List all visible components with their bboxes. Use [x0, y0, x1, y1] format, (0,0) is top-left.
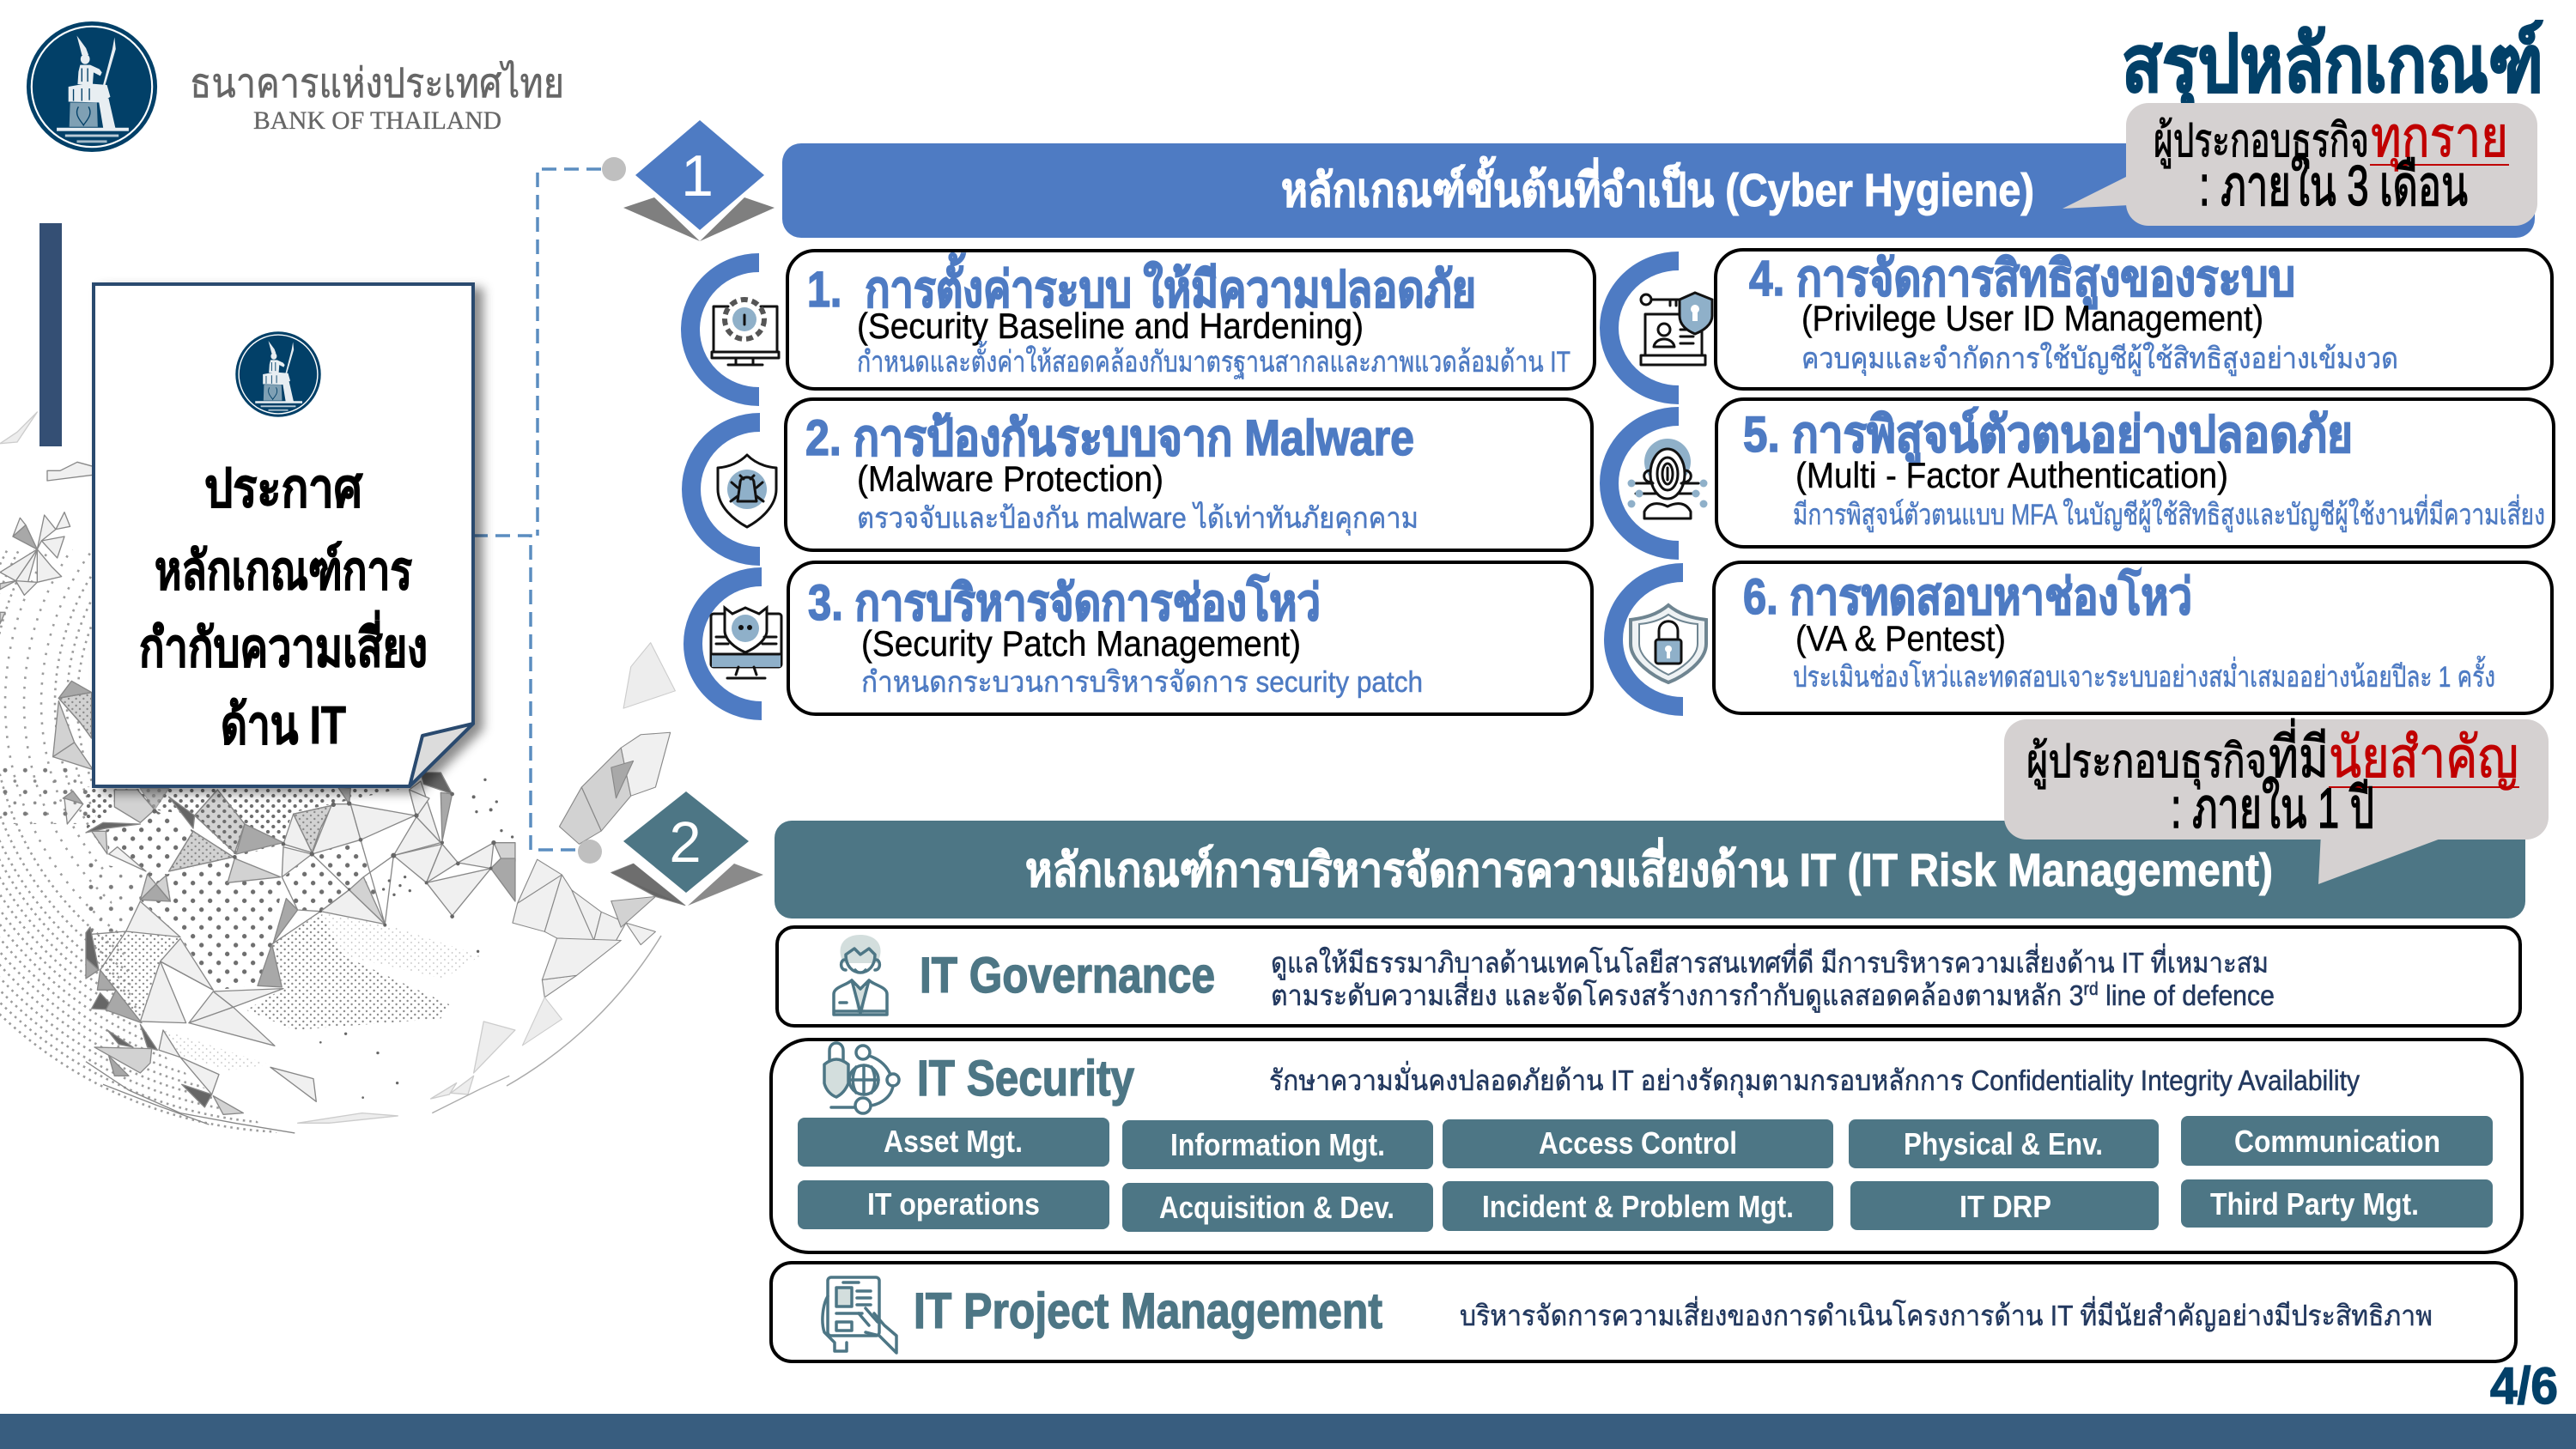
mesh below card	[86, 773, 515, 1133]
description: บริหารจัดการความเสี่ยงของการดำเนินโครงการด้าน IT ที่มีนัยสำคัญอย่างมีประสิทธิภาพ	[1460, 1296, 2433, 1331]
card frame	[1714, 562, 2552, 713]
description: รักษาความมั่นคงปลอดภัยด้าน IT อย่างรัดกุมตามกรอบหลักการ Confidentiality Integrity Availability	[1269, 1061, 2360, 1098]
heading: IT Security	[917, 1051, 1134, 1106]
title: 2. การป้องกันระบบจาก Malware	[805, 410, 1414, 466]
callout: all operators within 3 months: ผู้ประกอบธุรกิจ	[2154, 115, 2369, 169]
description line 1: ดูแลให้มีธรรมาภิบาลด้านเทคโนโลยีสารสนเทศที่ดี มีการบริหารความเสี่ยงด้าน IT ที่เหมาะสม	[1271, 943, 2269, 980]
chip: Asset Mgt.	[798, 1118, 1109, 1167]
panel: item 1 baseline	[690, 251, 1595, 397]
icon: fingerprint	[1628, 439, 1707, 518]
mesh left of card	[0, 412, 93, 824]
panel: item 5 MFA	[1609, 399, 2554, 550]
title: 3. การบริหารจัดการช่องโหว่	[808, 573, 1321, 631]
icon: lock shield	[1631, 605, 1706, 682]
callout: all operators within 3 months: ทุกราย	[2371, 105, 2508, 172]
card heading line 3: กำกับความเสี่ยง	[139, 610, 428, 678]
icon: person	[834, 935, 887, 1015]
panel: item 3 patch	[693, 562, 1592, 714]
subtitle: (Security Baseline and Hardening)	[857, 306, 1364, 346]
description line 2: ตามระดับความเสี่ยง และจัดโครงสร้างการกำกับดูแลสอดคล้องตามหลัก 3	[1271, 979, 2157, 1011]
card frame	[1716, 250, 2552, 389]
callout: significant operators within 1 year: นัยสำคัญ	[2329, 725, 2518, 790]
chip: Acquisition & Dev.: Acquisition & Dev.	[1159, 1190, 1394, 1225]
chip: Third Party Mgt.: Third Party Mgt.	[2210, 1186, 2419, 1222]
chip: Incident & Problem Mgt.: Incident & Problem Mgt.	[1482, 1189, 1794, 1224]
diamond badge 2	[611, 786, 763, 906]
subtitle: (Privilege User ID Management)	[1801, 298, 2263, 338]
card heading line 4: ด้าน IT	[221, 696, 346, 755]
icon: shield bug	[718, 455, 776, 527]
description: ควบคุมและจำกัดการใช้บัญชีผู้ใช้สิทธิสูงอย่างเข้มงวด	[1801, 342, 2398, 376]
panel: IT Governance	[777, 927, 2520, 1026]
globe network background	[0, 274, 725, 1133]
diamond badge 1: 1	[681, 143, 714, 209]
chip: IT operations: IT operations	[867, 1186, 1040, 1222]
card frame	[786, 399, 1592, 550]
English bank name: BANK OF THAILAND	[253, 106, 501, 135]
panel: IT Project Management	[771, 1263, 2516, 1361]
Thai bank name: ธนาคารแห่งประเทศไทย	[190, 59, 564, 106]
connector: dashed lines	[473, 157, 626, 864]
ring	[1609, 261, 1679, 395]
chip: Access Control: Access Control	[1539, 1125, 1737, 1161]
footer bar	[0, 1414, 2576, 1449]
section header bar 2	[775, 821, 2525, 919]
card frame	[788, 562, 1592, 714]
chip: IT DRP: IT DRP	[1959, 1189, 2051, 1224]
ring	[691, 422, 760, 556]
chip: IT DRP	[1850, 1181, 2159, 1230]
description: กำหนดกระบวนการบริหารจัดการ security patch	[861, 666, 1423, 699]
chip: Acquisition & Dev.	[1122, 1183, 1433, 1232]
mesh right of globe	[453, 643, 685, 1046]
subtitle: (Security Patch Management)	[861, 623, 1301, 664]
chip: Communication: Communication	[2234, 1124, 2440, 1159]
callout: significant operators within 1 year: ที่มี	[2269, 718, 2329, 789]
chip: Communication	[2181, 1116, 2493, 1166]
title: 1. การตั้งค่าระบบ ให้มีความปลอดภัย	[807, 253, 1476, 318]
panel: announcement card	[94, 284, 473, 786]
chip: Information Mgt.	[1122, 1120, 1433, 1169]
left accent bar	[39, 223, 62, 446]
ring	[1613, 573, 1683, 706]
panel: IT Security	[771, 1040, 2522, 1252]
icon: small seal	[235, 331, 321, 417]
ring	[693, 577, 762, 711]
description: ตรวจจับและป้องกัน malware ได้เท่าทันภัยคุกคาม	[857, 501, 1419, 536]
title: 5. การพิสูจน์ตัวตนอย่างปลอดภัย	[1743, 406, 2353, 465]
chip: Physical & Env.	[1849, 1119, 2159, 1168]
chip: Third Party Mgt.	[2181, 1179, 2493, 1228]
card frame	[787, 251, 1595, 389]
callout: significant operators within 1 year	[2004, 718, 2549, 884]
title: 6. การทดสอบหาช่องโหว่	[1743, 567, 2192, 625]
panel: item 4 privilege	[1609, 250, 2552, 395]
heading: IT Project Management	[914, 1283, 1382, 1339]
header logo: Bank of Thailand	[27, 21, 564, 152]
icon: skull monitor	[711, 608, 781, 678]
ring	[1609, 416, 1679, 550]
section header bar 1	[782, 143, 2535, 238]
callout: significant operators within 1 year: ผู้ประกอบธุรกิจ	[2026, 736, 2267, 790]
subtitle: (Malware Protection)	[857, 458, 1163, 499]
icon: key laptop	[1641, 293, 1712, 365]
subtitle: (VA & Pentest)	[1795, 618, 2006, 658]
ring	[690, 263, 759, 397]
description: กำหนดและตั้งค่าให้สอดคล้องกับมาตรฐานสากลและภาพแวดล้อมด้าน IT	[857, 341, 1571, 379]
card heading line 1: ประกาศ	[204, 459, 363, 518]
chip: Information Mgt.: Information Mgt.	[1170, 1127, 1385, 1162]
chip: Incident & Problem Mgt.	[1443, 1181, 1833, 1231]
diamond badge 2: 2	[669, 810, 702, 875]
panel: item 6 pentest	[1613, 562, 2552, 713]
description line 2: line of defence	[2099, 979, 2275, 1011]
chip: Access Control	[1443, 1119, 1833, 1168]
subtitle: (Multi - Factor Authentication)	[1795, 455, 2228, 495]
chip: Asset Mgt.: Asset Mgt.	[884, 1124, 1023, 1159]
title: 4. การจัดการสิทธิสูงของระบบ	[1749, 251, 2295, 309]
callout: all operators within 3 months	[2063, 103, 2537, 226]
section header bar 1: หลักเกณฑ์ขั้นต้นที่จำเป็น (Cyber Hygiene)	[1281, 156, 2034, 216]
diamond badge 1	[623, 120, 775, 241]
description line 2: rd	[2084, 979, 2099, 999]
heading: IT Governance	[920, 948, 1215, 1003]
icon: bank seal	[27, 21, 157, 152]
icon: lock globe	[824, 1043, 899, 1113]
icon: gear monitor	[712, 300, 779, 365]
card frame	[1716, 399, 2554, 547]
icon: folded corner	[410, 724, 473, 786]
chip: IT operations	[798, 1180, 1109, 1229]
card heading line 2: หลักเกณฑ์การ	[155, 541, 412, 601]
page number: 4/6	[2490, 1357, 2558, 1415]
callout: significant operators within 1 year: : ภายใน 1 ปี	[2171, 776, 2374, 840]
icon: tablet and hand	[823, 1277, 896, 1353]
panel: item 2 malware	[691, 399, 1592, 556]
chip: Physical & Env.: Physical & Env.	[1904, 1126, 2103, 1161]
section header bar 2: หลักเกณฑ์การบริหารจัดการความเสี่ยงด้าน IT (IT Risk Management)	[1025, 837, 2273, 896]
